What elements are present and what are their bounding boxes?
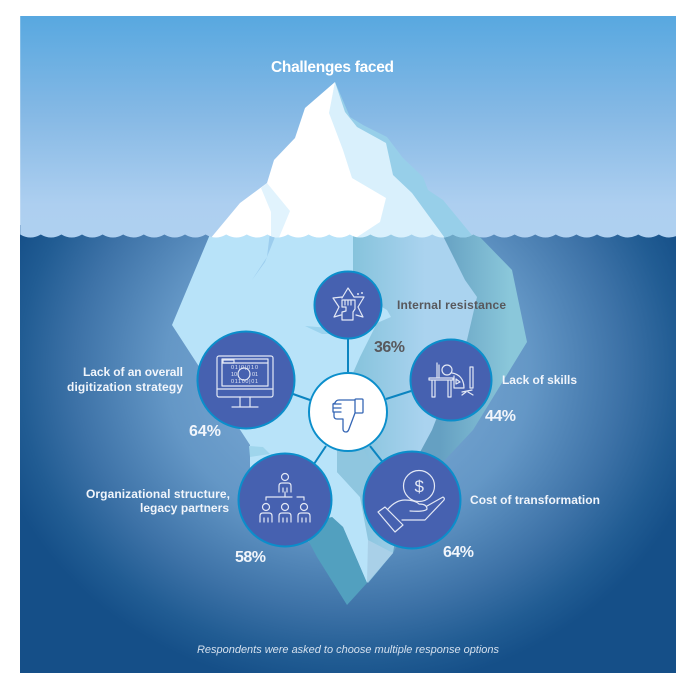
value: 64% cost: 64% (443, 544, 474, 561)
iceberg: shaded back face (335, 82, 472, 238)
node: organizational structure (238, 454, 332, 546)
label: lack of skills: Lack of skills (502, 373, 577, 387)
value: 64% digitization: 64% (189, 423, 221, 440)
icon: org chart (260, 474, 310, 522)
label: cost of transformation: Cost of transformation (470, 493, 600, 507)
footnote: Respondents were asked to choose multiple response options (197, 644, 500, 656)
icon: monitor with binary: 10 (231, 372, 237, 378)
node: cost of transformation (364, 452, 460, 548)
water background (20, 225, 676, 673)
sky (20, 16, 676, 240)
sky and iceberg above water (20, 16, 676, 245)
icon: thumbs down (333, 399, 363, 432)
label: organizational structure, legacy partners: Organizational structure, (86, 487, 230, 501)
icon: monitor with binary: 01 (252, 372, 258, 378)
iceberg: crack facet (261, 183, 290, 240)
icon: person asleep at desk (429, 363, 473, 397)
center node: thumbs down (309, 373, 387, 451)
label: lack of overall digitization strategy (67, 365, 183, 394)
label: organizational structure, legacy partners: legacy partners (140, 501, 229, 515)
value: 58%: 58% (235, 549, 266, 566)
value: 44%: 44% (485, 408, 516, 425)
iceberg: white face (205, 82, 386, 245)
icon: hand holding coin: $ (414, 477, 424, 496)
connector lines (293, 339, 411, 470)
icon: monitor with binary: 01|0|010 (231, 365, 258, 371)
label: organizational structure, legacy partners (86, 487, 230, 515)
label: lack of overall digitization strategy: digitization strategy (67, 380, 183, 394)
iceberg: underwater part (172, 232, 527, 605)
node: digitization strategy (198, 332, 294, 428)
label: internal resistance: Internal resistance (397, 298, 506, 312)
label: lack of overall digitization strategy: Lack of an overall (83, 365, 183, 379)
icon: monitor with binary: 01100|01 (231, 379, 258, 385)
node: lack of skills (410, 340, 492, 420)
iceberg: pale face (300, 82, 450, 245)
icon: raised fist in star (333, 288, 364, 320)
title: Challenges faced (271, 59, 394, 76)
icon: monitor with binary (217, 356, 273, 407)
value: 36%: 36% (374, 339, 405, 356)
node: internal resistance (314, 272, 382, 338)
